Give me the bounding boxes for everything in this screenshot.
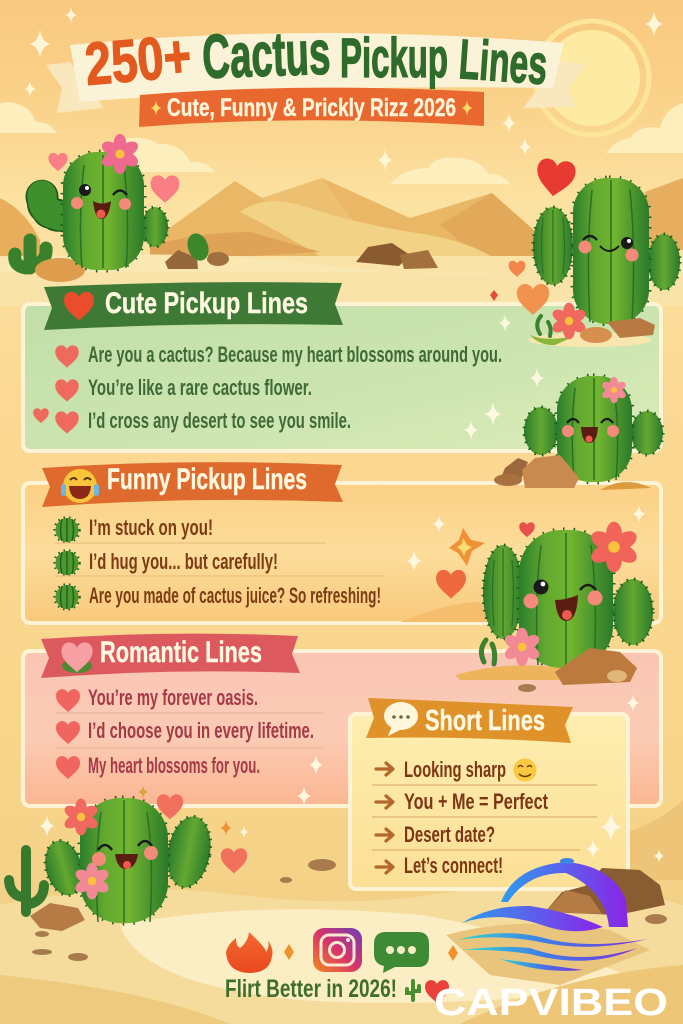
banner tails xyxy=(46,60,586,113)
icon: mini heart xyxy=(425,980,449,1003)
title text: 250+ xyxy=(82,22,194,98)
face xyxy=(92,841,158,869)
panel: short lines xyxy=(350,714,628,889)
cactus: big wink with red flower xyxy=(483,522,653,668)
banner body xyxy=(70,33,564,102)
icon: green chat xyxy=(374,932,429,973)
cactus: laughing with small flower xyxy=(524,376,663,482)
footer tagline: Flirt Better in 2026! xyxy=(225,975,397,1003)
flower and rocks under top right cactus xyxy=(528,303,655,347)
ribbon: short lines: Short Lines xyxy=(425,705,545,737)
subtitle ribbon: Cute, Funny & Prickly Rizz 2026 xyxy=(167,94,456,122)
sparkles top xyxy=(24,7,663,171)
romantic list: You’re my forever oasis. xyxy=(88,685,258,710)
romantic list: My heart blossoms for you. xyxy=(88,753,260,778)
ribbon: romantic lines: Romantic Lines xyxy=(100,636,262,669)
title text: Lines xyxy=(457,27,549,96)
icon: star left xyxy=(284,944,294,960)
sparkles around short panel xyxy=(586,694,664,863)
cute list xyxy=(33,342,502,434)
hearts and sparks near laughing cactus xyxy=(39,785,248,873)
sun xyxy=(535,21,649,135)
emoji: laughing xyxy=(61,469,99,503)
flower xyxy=(588,522,640,572)
ribbon: cute pickup lines: Cute Pickup Lines xyxy=(105,287,308,320)
ribbon: short lines xyxy=(366,698,573,743)
flowers xyxy=(62,799,111,899)
title banner xyxy=(46,19,586,127)
short list: You + Me = Perfect xyxy=(404,789,548,814)
watermark: CAPVIBEO: CAPVIBEO xyxy=(434,982,668,1024)
bottom sand xyxy=(0,800,683,1024)
ribbon: funny pickup lines xyxy=(42,462,343,507)
short list: Looking sharp xyxy=(404,757,506,782)
romantic list xyxy=(56,685,314,779)
funny list xyxy=(54,515,381,610)
icon: heart on leaves xyxy=(61,642,93,673)
rocks: desert centre xyxy=(165,230,438,269)
small cactus left xyxy=(15,240,85,282)
clouds xyxy=(0,102,683,184)
desert dunes xyxy=(0,178,683,306)
ribbon: romantic lines xyxy=(41,634,300,678)
cactus: winking with pink flower xyxy=(42,134,168,270)
emoji: smile xyxy=(514,758,536,782)
tall thin cactus xyxy=(9,850,44,912)
icon: instagram xyxy=(313,928,362,972)
ribbon: funny pickup lines: Funny Pickup Lines xyxy=(107,463,307,496)
short list: Desert date? xyxy=(404,822,495,847)
rocks behind logo xyxy=(545,868,665,915)
face xyxy=(524,580,602,621)
short list xyxy=(376,757,548,878)
cactus: top right winking xyxy=(533,178,680,324)
rocks under laughing cactus xyxy=(494,455,651,490)
funny list: Are you made of cactus juice? So refreshing! xyxy=(89,583,381,608)
cactus: laughing with two flowers xyxy=(39,798,216,923)
hearts: top right cluster xyxy=(490,157,577,315)
hearts near first cactus xyxy=(48,153,179,203)
flower xyxy=(601,377,627,403)
sparkles and accents near big cactus xyxy=(406,505,645,598)
panel: romantic xyxy=(23,651,661,806)
icon: speech bubble xyxy=(384,702,418,736)
subtitle ribbon xyxy=(139,88,484,127)
face xyxy=(578,236,638,262)
face xyxy=(562,419,619,443)
sparkles in panel xyxy=(464,314,544,440)
cute list: You’re like a rare cactus flower. xyxy=(88,375,312,400)
face xyxy=(71,184,131,219)
flower xyxy=(99,134,141,174)
flower, grass and rocks under big cactus xyxy=(455,628,637,692)
icon: star right xyxy=(448,945,458,961)
title text: Cactus xyxy=(201,19,331,92)
title text: Pickup xyxy=(340,26,448,89)
panel: funny xyxy=(23,483,661,623)
cute list: I’d cross any desert to see you smile. xyxy=(88,408,351,433)
icon: flame xyxy=(226,932,272,973)
funny list: I’m stuck on you! xyxy=(89,515,213,540)
short list: Let’s connect! xyxy=(404,853,503,878)
sand stripes behind logo xyxy=(446,924,650,985)
rock: left of laughing cactus xyxy=(30,903,85,931)
pebbles xyxy=(32,859,667,961)
logo: hat and waves xyxy=(457,858,648,971)
icon: mini cactus xyxy=(407,981,419,1000)
romantic list: I’d choose you in every lifetime. xyxy=(88,718,314,743)
panel: cute xyxy=(23,304,661,451)
ribbon: cute pickup lines xyxy=(44,282,343,330)
title text xyxy=(82,19,549,98)
funny list: I’d hug you... but carefully! xyxy=(89,549,278,574)
